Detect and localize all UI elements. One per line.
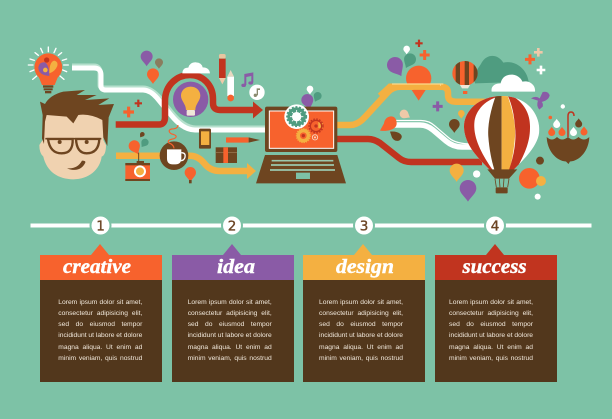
cane xyxy=(568,112,574,137)
panel: idea xyxy=(172,244,294,382)
drop: large orange on path xyxy=(380,66,443,101)
connector: white path xyxy=(72,66,273,130)
heading: design: design xyxy=(336,257,394,278)
text block: design: sed do eiusmod tempor xyxy=(319,321,403,328)
gear: small xyxy=(312,135,318,140)
orange blob xyxy=(380,116,397,131)
connector: yellow path xyxy=(116,156,248,171)
icon: coffee cup xyxy=(160,125,188,170)
heading: design xyxy=(303,255,425,280)
laptop base xyxy=(256,155,346,183)
glasses xyxy=(45,139,101,153)
gear: green on white xyxy=(284,104,309,129)
gear: yellow xyxy=(296,129,310,143)
text block: creative: incididunt ut labore et dolore xyxy=(58,332,142,339)
icon: fountain pen xyxy=(226,137,260,143)
connector: right yellow path xyxy=(318,85,485,125)
cloud: green xyxy=(475,56,529,83)
heading: creative: creative xyxy=(63,257,131,278)
text block: creative: magna aliqua. Ut enim ad xyxy=(58,344,142,351)
step 3: 3 xyxy=(360,218,368,234)
text block: idea: consectetur adipisicing elit, xyxy=(188,310,272,317)
icon: phone xyxy=(199,129,211,149)
panel: creative xyxy=(40,244,162,382)
text block: design: incididunt ut labore et dolore xyxy=(319,332,403,339)
step 3 xyxy=(353,214,375,236)
smile xyxy=(67,161,85,170)
umbrella with drops xyxy=(547,104,589,164)
heading: success: success xyxy=(461,257,526,278)
step 4 xyxy=(484,214,506,236)
left icon cluster xyxy=(123,51,211,183)
text block: creative xyxy=(40,280,162,382)
balloon: small orange xyxy=(185,167,196,183)
text block: idea: minim veniam, quis nostrud xyxy=(188,355,272,362)
sprout drops xyxy=(127,131,150,162)
heading: idea xyxy=(172,255,294,280)
right illustration xyxy=(380,40,550,202)
small drops xyxy=(398,108,465,133)
timeline bar xyxy=(30,224,592,228)
arrow head: red xyxy=(253,102,263,118)
step 1: 1 xyxy=(96,218,105,234)
heading: success xyxy=(434,255,556,280)
text block: design: magna aliqua. Ut enim ad xyxy=(319,344,403,351)
heading: creative xyxy=(40,255,162,280)
text block: success: consectetur adipisicing elit, xyxy=(449,310,533,317)
drops: top left xyxy=(384,46,418,80)
arrow head: white xyxy=(273,121,283,139)
text block: success: incididunt ut labore et dolore xyxy=(449,332,533,339)
illustration and timeline xyxy=(28,40,592,234)
person head xyxy=(39,90,114,179)
infographic page xyxy=(28,40,592,382)
collar xyxy=(487,169,517,179)
heading: idea: idea xyxy=(216,257,255,278)
text block: idea xyxy=(172,280,294,382)
arrow head: yellow xyxy=(247,163,256,179)
drops above laptop xyxy=(300,86,323,111)
eyes xyxy=(58,140,89,144)
drops xyxy=(548,104,588,136)
icon: gift box xyxy=(216,147,237,163)
text block: success: minim veniam, quis nostrud xyxy=(449,355,533,362)
text block: design: consectetur adipisicing elit, xyxy=(319,310,403,317)
butterfly xyxy=(531,92,550,110)
connector: right red path xyxy=(337,139,482,162)
text block: idea: magna aliqua. Ut enim ad xyxy=(188,344,272,351)
cloud: white xyxy=(492,75,535,92)
brown blob xyxy=(390,132,402,141)
text block: creative: sed do eiusmod tempor xyxy=(58,321,142,328)
text block: success: magna aliqua. Ut enim ad xyxy=(449,344,533,351)
hair xyxy=(40,90,114,146)
umbrella canopy xyxy=(547,137,589,164)
laptop screen xyxy=(265,107,337,152)
text block: creative: consectetur adipisicing elit, xyxy=(58,310,142,317)
drops and dots under balloon xyxy=(450,157,546,202)
plus signs xyxy=(123,100,142,117)
text block: design: minim veniam, quis nostrud xyxy=(319,355,403,362)
text block: creative: Lorem ipsum dolor sit amet, xyxy=(58,299,142,306)
icon: idea bulb with rays xyxy=(28,47,68,93)
text block: idea: Lorem ipsum dolor sit amet, xyxy=(188,299,272,306)
icon: note in white circle xyxy=(249,85,265,100)
text block: design xyxy=(303,280,425,382)
text block: success xyxy=(434,280,556,382)
text block: idea: incididunt ut labore et dolore xyxy=(188,332,272,339)
icon: red pencil xyxy=(219,54,226,84)
text block: creative: minim veniam, quis nostrud xyxy=(58,355,142,362)
connector: right white path xyxy=(393,120,472,147)
drop: grey xyxy=(155,58,163,69)
text block: success: Lorem ipsum dolor sit amet, xyxy=(449,299,533,306)
icon: camera xyxy=(125,161,150,181)
timeline xyxy=(30,214,592,236)
icon: white pencil xyxy=(227,70,234,101)
step 2: 2 xyxy=(228,218,236,234)
drop: purple xyxy=(141,51,153,66)
icon: music note xyxy=(241,72,253,87)
panel: design xyxy=(303,244,425,382)
connector: red path xyxy=(116,75,254,124)
cloud: small white xyxy=(182,62,210,73)
panel: success xyxy=(435,244,557,382)
text block: design: Lorem ipsum dolor sit amet, xyxy=(319,299,403,306)
hot air balloon xyxy=(464,96,540,194)
text block: success: sed do eiusmod tempor xyxy=(449,321,533,328)
laptop group icons xyxy=(216,54,346,183)
envelope xyxy=(464,96,540,170)
step 2 xyxy=(221,214,243,236)
plus signs xyxy=(415,40,545,111)
basket xyxy=(496,187,508,193)
step 4: 4 xyxy=(491,218,499,234)
gear: red xyxy=(309,119,323,133)
balloon: small striped xyxy=(452,60,478,94)
text block: idea: sed do eiusmod tempor xyxy=(188,321,272,328)
face xyxy=(39,107,106,179)
icon: lightbulb in purple circle xyxy=(173,82,208,117)
ropes xyxy=(495,179,509,187)
step 1 xyxy=(90,214,112,236)
drop: orange xyxy=(147,68,159,84)
